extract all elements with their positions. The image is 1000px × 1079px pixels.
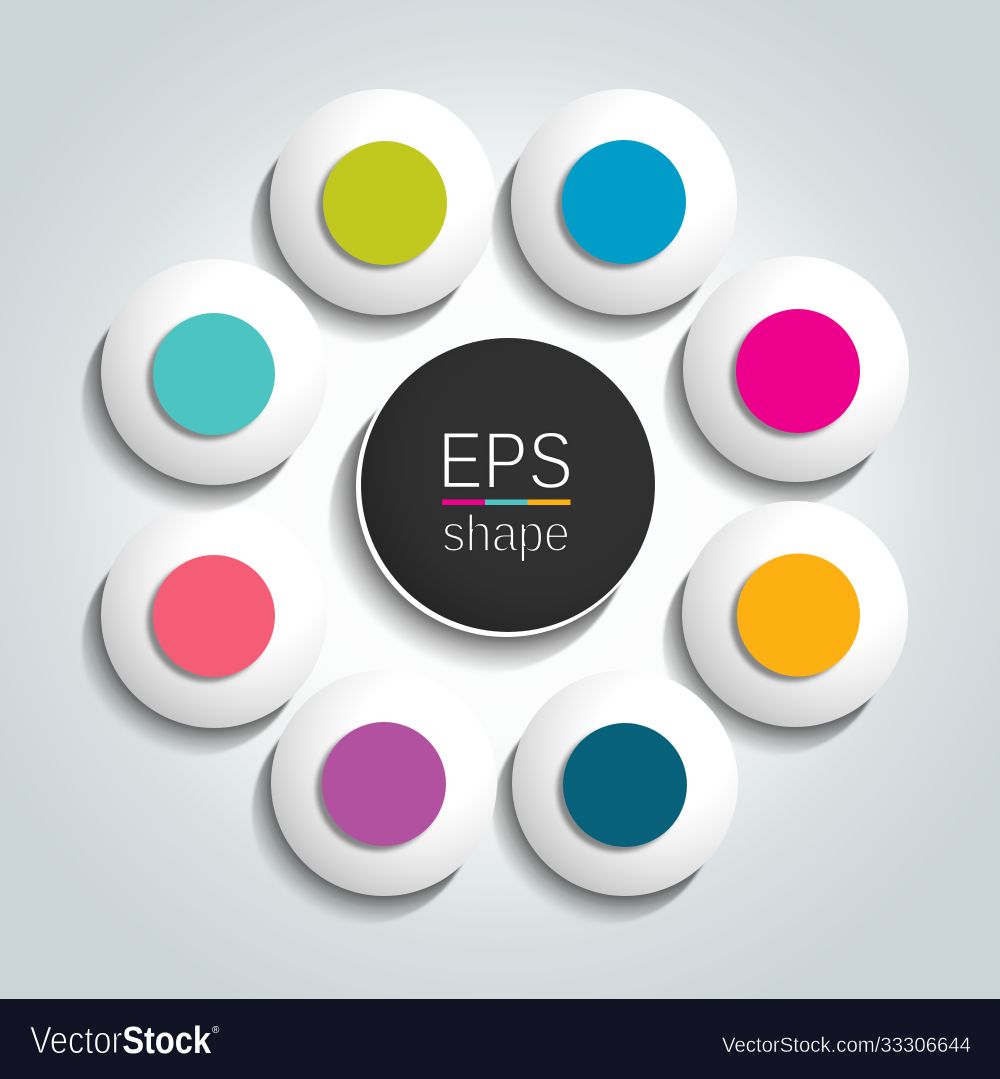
- disc: purple: [252, 670, 497, 924]
- disc: turquoise: [82, 259, 327, 513]
- disc: lime: [251, 89, 496, 343]
- footer logo: VectorStock: [30, 1020, 212, 1062]
- tricolor divider: [442, 500, 570, 505]
- footer bar: [0, 999, 1000, 1079]
- registered mark: ®: [212, 1025, 220, 1036]
- footer id: VectorStock.com/33306644: [722, 1034, 971, 1057]
- center badge: [329, 337, 656, 674]
- disc: coral: [82, 502, 327, 756]
- heading: EPS: EPS: [438, 416, 573, 506]
- disc: magenta: [664, 256, 909, 510]
- subheading: shape: shape: [442, 505, 570, 563]
- disc: blue: [492, 89, 737, 343]
- disc: deep teal: [493, 670, 738, 924]
- disc: amber: [663, 501, 908, 755]
